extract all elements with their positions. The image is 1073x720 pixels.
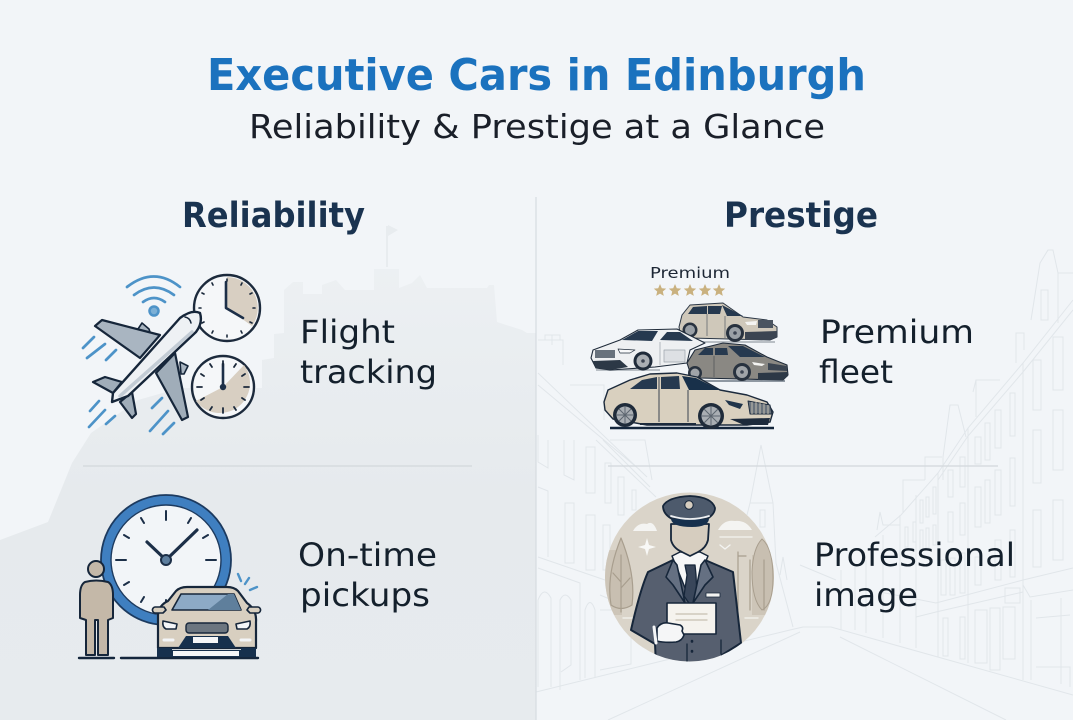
heading: prestige: Prestige <box>724 196 878 236</box>
card <box>667 603 716 634</box>
label: professional image: Professional <box>814 536 1015 574</box>
scenery <box>605 521 775 665</box>
subtitle: Reliability & Prestige at a Glance <box>249 107 825 146</box>
plane fuselage <box>112 312 201 402</box>
person <box>80 561 113 655</box>
panel: reliability <box>79 196 472 658</box>
ground line <box>79 657 258 659</box>
icon: clock, person and car <box>79 495 261 658</box>
icon: chauffeur in circle <box>605 492 775 665</box>
title: Executive Cars in Edinburgh <box>207 50 866 101</box>
car: grey sedan <box>687 343 788 381</box>
badge text: premium: Premium <box>650 264 730 282</box>
label: professional image: image <box>814 576 918 614</box>
label: flight tracking <box>300 313 437 391</box>
label: professional image <box>814 536 1015 614</box>
panel: prestige <box>591 196 1015 665</box>
label: on-time pickups <box>298 536 437 614</box>
front car <box>152 587 261 657</box>
label: on-time pickups: On-time <box>298 536 437 574</box>
label: on-time pickups: pickups <box>300 576 430 614</box>
car: white sedan <box>591 329 705 370</box>
pocket square <box>706 593 720 597</box>
castle silhouette backdrop <box>0 225 536 720</box>
icon: upper clock <box>194 275 260 341</box>
car: beige sedan <box>604 373 774 429</box>
hand <box>657 623 684 642</box>
row divider <box>83 465 472 467</box>
label: flight tracking: Flight <box>300 313 395 351</box>
jacket <box>631 560 741 665</box>
big clock <box>101 495 231 625</box>
face <box>671 524 709 556</box>
label: premium fleet <box>819 313 974 391</box>
cap <box>663 496 715 519</box>
icon: plane with clocks and wifi <box>83 275 260 434</box>
label: premium fleet: fleet <box>819 353 893 391</box>
car: suv <box>679 303 777 342</box>
label: premium fleet: Premium <box>820 313 974 351</box>
alert ticks <box>238 574 257 590</box>
star rating <box>654 284 725 296</box>
icon: premium car fleet <box>591 264 788 429</box>
central vertical divider <box>535 197 537 720</box>
heading: reliability: Reliability <box>182 196 365 236</box>
icon: lower clock <box>192 356 254 418</box>
row divider <box>608 465 998 467</box>
label: flight tracking: tracking <box>300 353 437 391</box>
Edinburgh street line art backdrop <box>536 250 1073 720</box>
plane wings <box>95 320 160 358</box>
